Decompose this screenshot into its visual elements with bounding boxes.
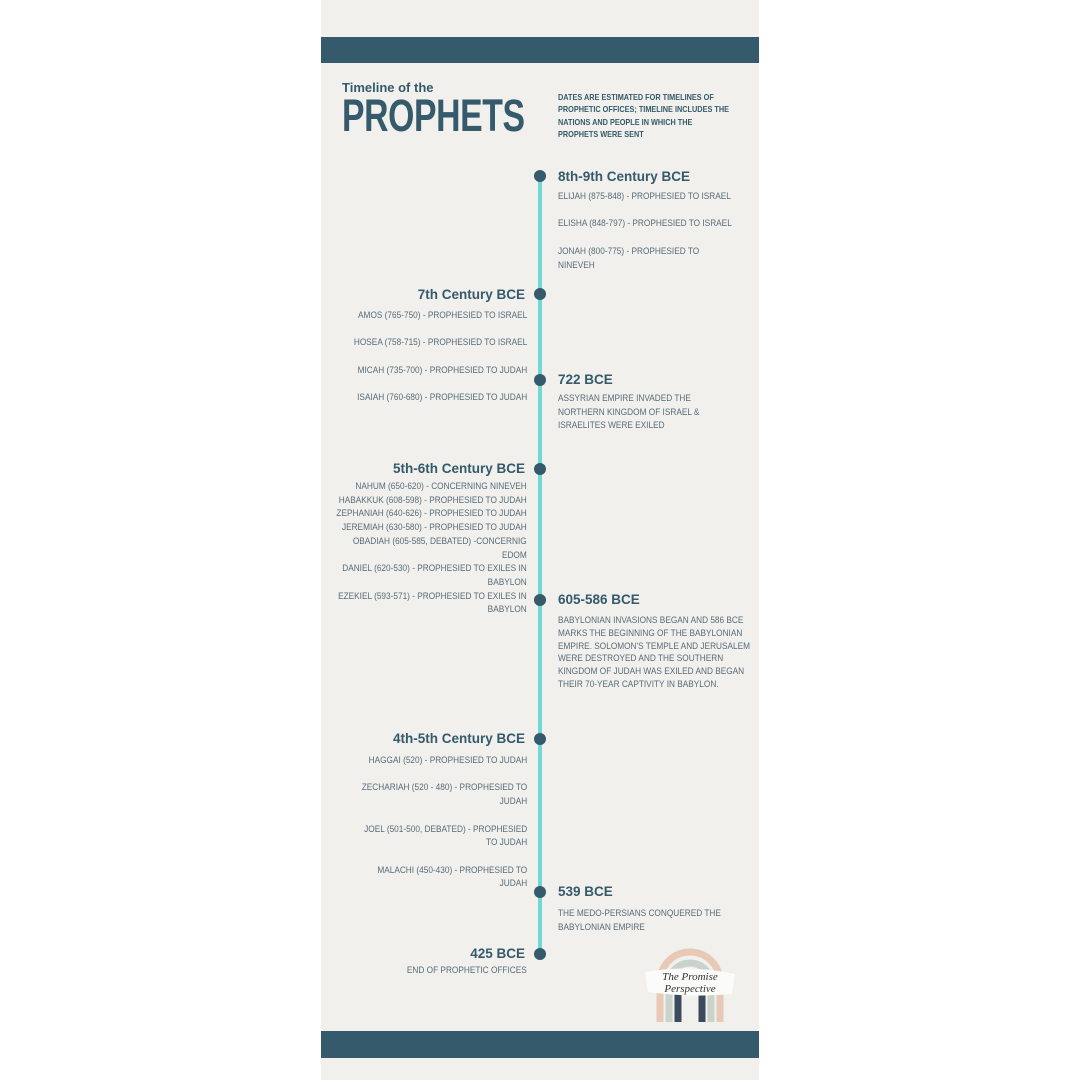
text: JOEL (501-500, DEBATED) - PROPHESIED — [364, 824, 527, 835]
text: KINGDOM OF JUDAH WAS EXILED AND BEGAN — [558, 666, 744, 677]
description: DATES ARE ESTIMATED FOR TIMELINES OF — [558, 92, 714, 102]
text: THE MEDO-PERSIANS CONQUERED THE — [558, 908, 721, 919]
dots — [534, 170, 546, 182]
text: BABYLONIAN EMPIRE — [558, 922, 645, 933]
text: NINEVEH — [558, 260, 595, 271]
text: ELIJAH (875-848) - PROPHESIED TO ISRAEL — [558, 191, 731, 202]
text: MARKS THE BEGINNING OF THE BABYLONIAN — [558, 628, 742, 639]
text: JUDAH — [499, 878, 527, 889]
text: HAGGAI (520) - PROPHESIED TO JUDAH — [368, 755, 527, 766]
background panel — [321, 0, 759, 1080]
text: NAHUM (650-620) - CONCERNING NINEVEH — [356, 481, 527, 492]
text: DANIEL (620-530) - PROPHESIED TO EXILES IN — [342, 563, 527, 574]
text: ELISHA (848-797) - PROPHESIED TO ISRAEL — [558, 218, 732, 229]
logo — [645, 948, 735, 1022]
entry: 7th century: 7th Century BCE — [418, 287, 525, 302]
text: OBADIAH (605-585, DEBATED) -CONCERNIG — [353, 536, 527, 547]
text: JONAH (800-775) - PROPHESIED TO — [558, 246, 699, 257]
text: EZEKIEL (593-571) - PROPHESIED TO EXILES IN — [338, 591, 527, 602]
text: AMOS (765-750) - PROPHESIED TO ISRAEL — [358, 310, 527, 321]
text: ZECHARIAH (520 - 480) - PROPHESIED TO — [361, 782, 527, 793]
text: ISRAELITES WERE EXILED — [558, 420, 665, 431]
entry: 722 BCE: 722 BCE — [558, 372, 613, 387]
text: ZEPHANIAH (640-626) - PROPHESIED TO JUDAH — [337, 508, 527, 519]
description: PROPHETS WERE SENT — [558, 129, 644, 139]
text: HABAKKUK (608-598) - PROPHESIED TO JUDAH — [339, 495, 527, 506]
text: ASSYRIAN EMPIRE INVADED THE — [558, 393, 691, 404]
text: JUDAH — [499, 796, 527, 807]
text: JEREMIAH (630-580) - PROPHESIED TO JUDAH — [342, 522, 527, 533]
logo: The Promise — [662, 971, 718, 983]
text: MICAH (735-700) - PROPHESIED TO JUDAH — [357, 365, 527, 376]
text: BABYLONIAN INVASIONS BEGAN AND 586 BCE — [558, 615, 743, 626]
description: NATIONS AND PEOPLE IN WHICH THE — [558, 117, 692, 127]
title: PROPHETS — [342, 90, 525, 141]
text: EMPIRE. SOLOMON'S TEMPLE AND JERUSALEM — [558, 641, 750, 652]
top bar — [321, 37, 759, 63]
text: THEIR 70-YEAR CAPTIVITY IN BABYLON. — [558, 679, 719, 690]
text: BABYLON — [488, 577, 527, 588]
title: Timeline of the — [342, 80, 434, 95]
timeline line — [538, 176, 542, 954]
text: ISAIAH (760-680) - PROPHESIED TO JUDAH — [357, 392, 527, 403]
entry: 605-586 BCE: 605-586 BCE — [558, 592, 640, 607]
entry: 4th-5th century: 4th-5th Century BCE — [393, 731, 525, 746]
entry: 539 BCE: 539 BCE — [558, 884, 613, 899]
description — [558, 92, 729, 139]
description: PROPHETIC OFFICES; TIMELINE INCLUDES THE — [558, 104, 729, 114]
text: HOSEA (758-715) - PROPHESIED TO ISRAEL — [354, 337, 527, 348]
text: BABYLON — [488, 604, 527, 615]
text: EDOM — [502, 550, 527, 561]
text: END OF PROPHETIC OFFICES — [407, 965, 527, 976]
entry: 8th-9th century: 8th-9th Century BCE — [558, 169, 690, 184]
entry: 5th-6th century: 5th-6th Century BCE — [393, 461, 525, 476]
text: TO JUDAH — [486, 837, 527, 848]
entry: 425 BCE: 425 BCE — [470, 946, 525, 961]
text: WERE DESTROYED AND THE SOUTHERN — [558, 653, 723, 664]
text: NORTHERN KINGDOM OF ISRAEL & — [558, 407, 699, 418]
bottom bar — [321, 1031, 759, 1058]
logo: Perspective — [663, 983, 716, 995]
text: MALACHI (450-430) - PROPHESIED TO — [377, 865, 527, 876]
